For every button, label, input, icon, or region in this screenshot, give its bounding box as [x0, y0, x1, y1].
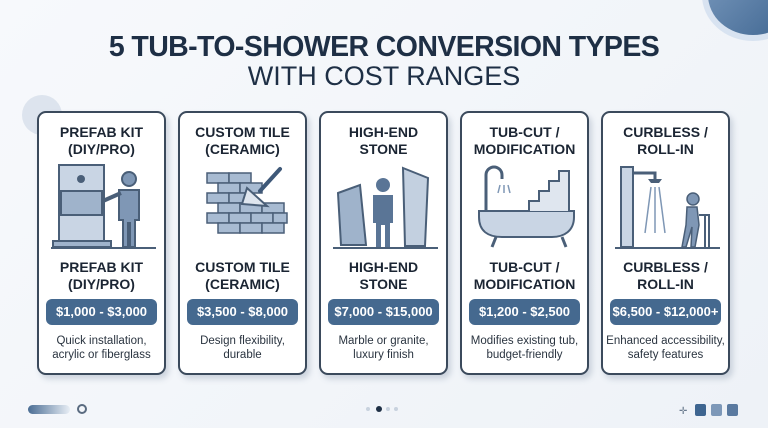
- description: [338, 335, 429, 361]
- panel: prefab kit: PREFAB KIT: [60, 124, 143, 140]
- panel: high-end stone: [319, 111, 448, 375]
- panel: custom tile: (CERAMIC): [205, 141, 280, 157]
- panel: custom tile: [178, 111, 307, 375]
- description: Marble or granite,: [338, 335, 429, 347]
- panel: curbless: ROLL-IN: [637, 276, 694, 292]
- panel: curbless: ROLL-IN: [637, 141, 694, 157]
- panel: tub-cut: MODIFICATION: [474, 276, 575, 292]
- panel: high-end stone: STONE: [360, 141, 407, 157]
- description: Design flexibility,: [200, 335, 285, 347]
- price pill: $6,500 - $12,000+: [613, 304, 718, 319]
- icon: prefab shower with person: [51, 164, 156, 249]
- footer: left progress bar: [28, 405, 70, 414]
- price pill: [187, 299, 298, 325]
- icon: stone slabs with person: [333, 166, 438, 249]
- description: [606, 335, 725, 361]
- price pill: [469, 299, 580, 325]
- footer: right squares: [679, 404, 738, 417]
- price pill: [610, 299, 721, 325]
- panel: high-end stone: STONE: [360, 276, 407, 292]
- panel: prefab kit: PREFAB KIT: [60, 259, 143, 275]
- description: Enhanced accessibility,: [606, 335, 725, 347]
- description: safety features: [628, 349, 703, 361]
- icon: tub with steps: [478, 166, 575, 248]
- panel: tub-cut: TUB-CUT /: [490, 259, 560, 275]
- price pill: [46, 299, 157, 325]
- footer: right squares: ✛: [679, 406, 687, 417]
- description: [52, 335, 151, 361]
- footer: pagination dots: [366, 406, 398, 412]
- panel: high-end stone: HIGH-END: [349, 259, 418, 275]
- price pill: [328, 299, 439, 325]
- price pill: $1,200 - $2,500: [479, 304, 570, 319]
- panel: tub-cut: [460, 111, 589, 375]
- icon: tile wall with trowel: [206, 166, 288, 234]
- panel: prefab kit: (DIY/PRO): [68, 141, 135, 157]
- panel: curbless: [601, 111, 730, 375]
- panel: custom tile: CUSTOM TILE: [195, 124, 290, 140]
- panel: custom tile: CUSTOM TILE: [195, 259, 290, 275]
- description: acrylic or fiberglass: [52, 349, 151, 361]
- decoration: left circle: [22, 95, 62, 135]
- description: Quick installation,: [56, 335, 147, 347]
- icon: curbless shower with walker: [615, 166, 720, 249]
- panel: curbless: CURBLESS /: [623, 259, 708, 275]
- description: budget-friendly: [486, 349, 563, 361]
- panel: curbless: CURBLESS /: [623, 124, 708, 140]
- title: 5 TUB-TO-SHOWER CONVERSION TYPES: [109, 31, 659, 63]
- description: luxury finish: [353, 349, 414, 361]
- price pill: $1,000 - $3,000: [56, 304, 147, 319]
- description: durable: [223, 349, 262, 361]
- panel: custom tile: (CERAMIC): [205, 276, 280, 292]
- price pill: $3,500 - $8,000: [197, 304, 288, 319]
- panel: tub-cut: TUB-CUT /: [490, 124, 560, 140]
- price pill: $7,000 - $15,000: [334, 304, 433, 319]
- decoration: top right circle: [708, 0, 768, 35]
- panel: high-end stone: HIGH-END: [349, 124, 418, 140]
- subtitle: WITH COST RANGES: [248, 61, 520, 91]
- description: Modifies existing tub,: [471, 335, 578, 347]
- panel: prefab kit: [37, 111, 166, 375]
- description: [200, 335, 285, 361]
- panel: tub-cut: MODIFICATION: [474, 141, 575, 157]
- description: [471, 335, 578, 361]
- panel: prefab kit: (DIY/PRO): [68, 276, 135, 292]
